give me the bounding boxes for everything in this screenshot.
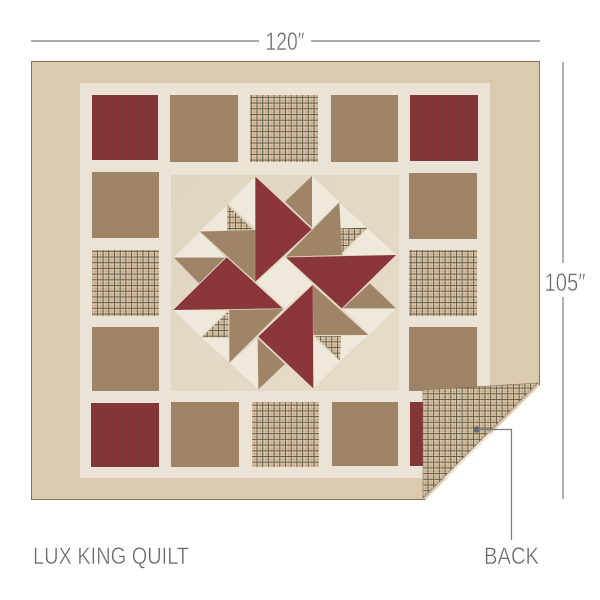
row 1 blocks	[92, 95, 478, 162]
left column blocks	[92, 172, 159, 391]
callout: back leader line	[473, 426, 512, 540]
bottom row blocks	[91, 402, 426, 467]
quilt	[32, 62, 542, 502]
central star	[173, 176, 396, 389]
label: lux king quilt: LUX KING QUILT	[33, 543, 189, 570]
folded corner cut-out	[423, 383, 542, 502]
right column blocks	[409, 173, 477, 391]
dimension: height 105 inches: 105″	[544, 269, 586, 297]
folded corner showing quilt back	[423, 383, 538, 498]
centre panel background	[171, 175, 399, 391]
dimension: width 120 inches: 120″	[266, 28, 305, 56]
outer border	[32, 62, 540, 500]
label: back: BACK	[484, 543, 539, 570]
cream sashing	[80, 83, 490, 478]
